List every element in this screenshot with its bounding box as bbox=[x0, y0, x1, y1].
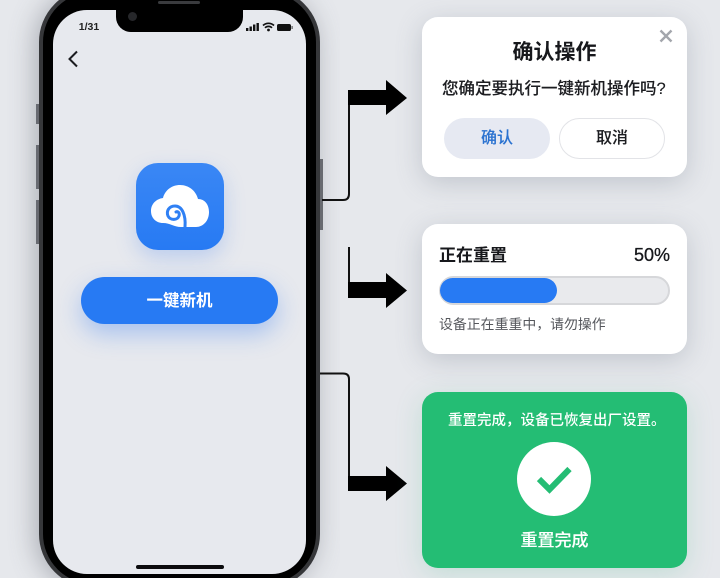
arrow 3 bbox=[320, 374, 407, 501]
confirm button: 确认 bbox=[481, 130, 513, 147]
one-tap button bbox=[81, 277, 278, 324]
progress percent: 50% bbox=[634, 245, 670, 265]
back chevron bbox=[68, 50, 78, 68]
camera bbox=[128, 12, 137, 21]
button label: 一键新机 bbox=[146, 292, 212, 310]
progress title: 正在重置 bbox=[439, 246, 507, 265]
cancel button: 取消 bbox=[596, 130, 628, 147]
dialog title: 确认操作 bbox=[512, 41, 596, 64]
panel: success bbox=[422, 392, 687, 568]
status icons bbox=[246, 22, 293, 32]
notch bbox=[116, 0, 243, 32]
success message: 重置完成，设备已恢复出厂设置。 bbox=[448, 413, 666, 429]
progress note: 设备正在重重中，请勿操作 bbox=[439, 316, 606, 332]
check icon bbox=[517, 442, 591, 516]
close icon bbox=[660, 30, 672, 42]
phone bbox=[20, 0, 330, 578]
phone screen bbox=[53, 10, 306, 574]
panel: progress bbox=[422, 224, 687, 354]
panel: confirm dialog bbox=[422, 17, 687, 177]
phone body bbox=[39, 0, 320, 578]
status time: 1/31 bbox=[79, 21, 99, 33]
confirm button bbox=[444, 118, 550, 159]
progress bar bbox=[439, 276, 670, 305]
success label: 重置完成 bbox=[520, 531, 588, 550]
progress fill bbox=[440, 278, 557, 303]
phone side buttons bbox=[36, 104, 323, 244]
arrow 2 bbox=[348, 247, 407, 308]
arrow 1 bbox=[322, 80, 407, 200]
speaker bbox=[158, 1, 200, 4]
dialog question: 您确定要执行一键新机操作吗? bbox=[442, 80, 666, 98]
cancel button bbox=[559, 118, 665, 159]
home indicator bbox=[136, 565, 224, 569]
app icon: cloud bbox=[136, 163, 224, 250]
